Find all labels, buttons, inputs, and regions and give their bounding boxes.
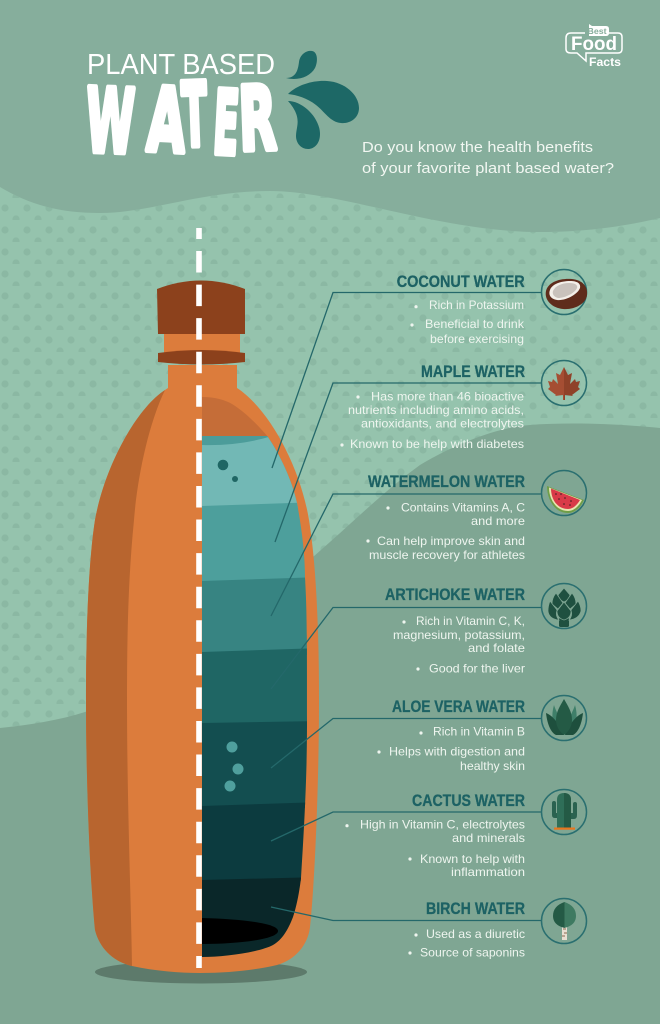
text: birch benefits: Source of saponins [420,946,525,960]
title: E [211,71,242,175]
title: T [180,63,209,167]
text: artichoke benefits [393,614,525,676]
text: maple benefits: antioxidants, and electrolytes [361,417,524,431]
heading: aloe vera: ALOE VERA WATER [392,697,525,716]
text: maple benefits: nutrients including amino acids, [348,403,524,417]
neck ring [158,350,245,364]
logo: Best Food Facts: Food [571,34,617,55]
intro question: of your favorite plant based water? [362,160,614,177]
text: artichoke benefits: Rich in Vitamin C, K, [416,614,525,628]
bottle [86,280,322,973]
icon: maple leaf [542,360,586,406]
panel: cactus water [345,790,586,879]
text: coconut benefits: before exercising [430,332,524,346]
text: cactus benefits [345,818,525,879]
bottle neck [164,330,240,356]
icon: watermelon [542,470,586,516]
panel: artichoke water [385,584,586,676]
panel: maple water [340,360,586,451]
text: maple benefits: Has more than 46 bioactive [371,390,524,404]
text: watermelon benefits [366,501,525,562]
logo: Best Food Facts: Facts [589,55,621,69]
panel: aloe vera water [377,696,586,773]
panel: coconut water [397,270,587,346]
icon: aloe vera [542,696,586,740]
text: maple benefits [340,390,524,451]
bottle body [86,365,319,973]
text: cactus benefits: inflammation [451,865,525,879]
text: cactus benefits: Known to help with [420,852,525,866]
text: coconut benefits [410,298,525,346]
text: artichoke benefits: and folate [468,641,525,655]
panel: birch water [408,898,586,960]
text: aloe vera benefits: healthy skin [460,759,525,773]
panel: watermelon water [366,470,586,562]
text: aloe vera benefits [377,725,525,773]
heading: watermelon: WATERMELON WATER [368,472,525,491]
intro question: Do you know the health benefits [362,139,593,156]
heading: cactus: CACTUS WATER [412,791,525,810]
icon: birch tree [542,898,586,944]
icon: coconut [542,270,587,314]
icon: cactus [542,790,586,834]
text: watermelon benefits: and more [471,514,525,528]
heading: artichoke: ARTICHOKE WATER [385,585,525,604]
text: cactus benefits: and minerals [452,831,525,845]
text: artichoke benefits: magnesium, potassium, [393,628,525,642]
text: watermelon benefits: Contains Vitamins A, C [401,501,525,515]
bottle interior with water layers [202,397,307,957]
bottle left shading [86,390,165,966]
dashed centre line [196,228,202,968]
icon: water splash [286,51,359,149]
title: R [237,67,278,171]
bottle cap [157,280,245,334]
title: PLANT BASED [87,49,275,81]
text: coconut benefits: Beneficial to drink [425,317,525,331]
text: artichoke benefits: Good for the liver [429,662,525,676]
bottle shadow [95,960,307,984]
icon: artichoke [542,584,586,628]
text: birch benefits [408,927,525,960]
heading: birch: BIRCH WATER [426,899,525,918]
text: aloe vera benefits: Helps with digestion and [389,745,525,759]
title: W [84,70,136,174]
text: cactus benefits: High in Vitamin C, electrolytes [360,818,525,832]
heading: maple: MAPLE WATER [421,362,525,381]
text: birch benefits: Used as a diuretic [426,927,525,941]
text: watermelon benefits: Can help improve skin and [377,534,525,548]
title [84,49,278,175]
bubbles top [218,460,238,482]
title: A [145,69,188,173]
text: coconut benefits: Rich in Potassium [429,298,524,312]
logo: Best Food Facts: Best [588,27,607,36]
heading: coconut: COCONUT WATER [397,272,525,291]
text: watermelon benefits: muscle recovery for athletes [369,548,525,562]
text: maple benefits: Known to be help with diabetes [350,437,524,451]
leader lines [271,292,542,920]
intro question [362,139,614,177]
bubbles middle [224,742,244,792]
text: aloe vera benefits: Rich in Vitamin B [433,725,525,739]
logo: Best Food Facts [566,24,622,69]
